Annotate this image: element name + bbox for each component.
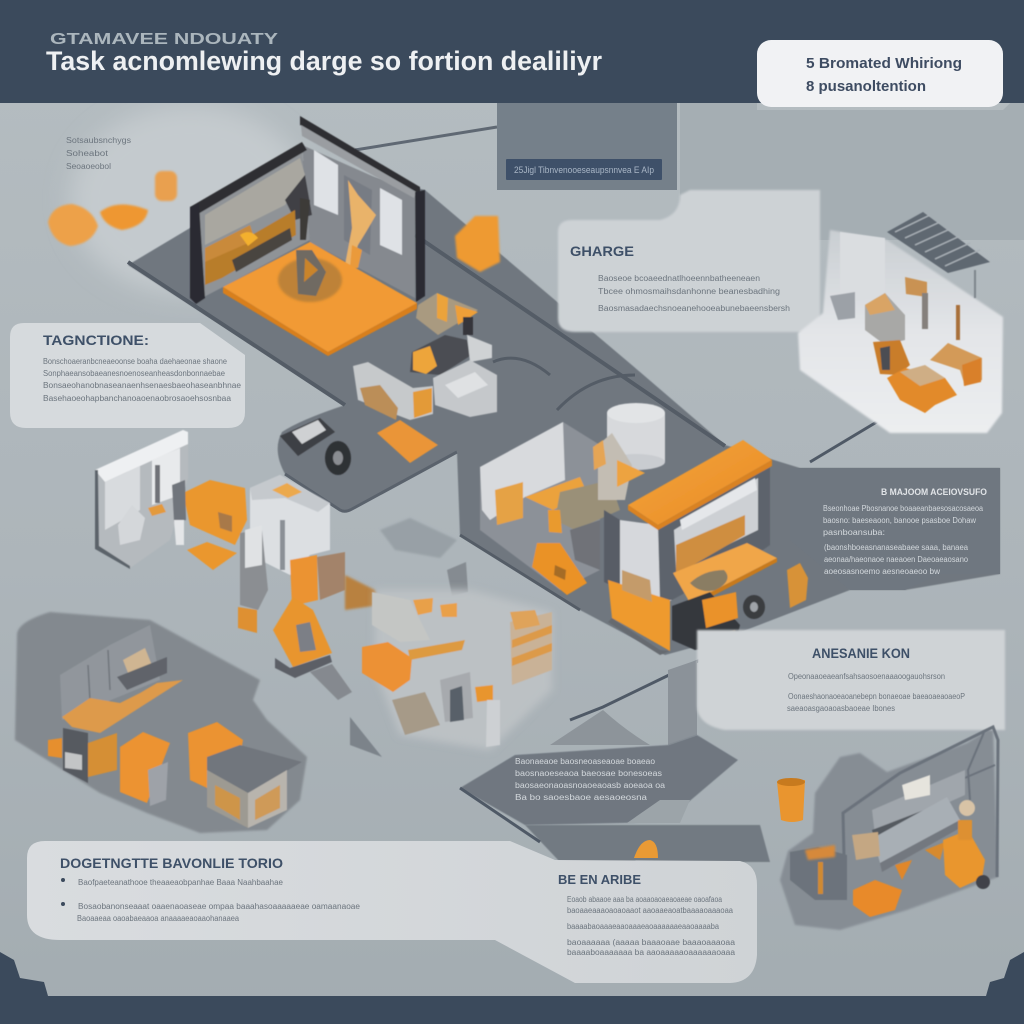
icon: translucent machine and crates <box>353 362 438 463</box>
bullet list: Baofpaeteanathooe theaaeaobpanhae Baaa Naahbaahae <box>78 878 284 887</box>
back walls <box>198 148 310 300</box>
heading: ANESANIE KON <box>812 645 910 661</box>
white booth <box>250 475 330 575</box>
title: Task acnomlewing darge so fortion dealiliyr <box>46 46 602 76</box>
footer band <box>0 952 1024 1024</box>
overline: GTAMAVEE NDOUATY <box>50 31 278 48</box>
note top left <box>66 136 131 171</box>
body copy: Oonaeshaonaoeaoanebepn bonaeoae baeaoaeaoaeoP <box>788 692 965 701</box>
body copy: Sonphaeansobaeanesnoenoseanheasdonbonnaebae <box>43 369 226 378</box>
arm and grips <box>598 433 632 500</box>
dark grey header tab with caption bar <box>497 103 677 190</box>
central machine <box>865 293 905 345</box>
orange barrels <box>290 555 318 606</box>
central translucent shapes <box>380 518 457 558</box>
note top left: Seoaoeobol <box>66 162 111 171</box>
callout top right: 8 pusanoltention <box>806 78 926 95</box>
text block: grey central caption: Baonaeaoe baosneoaseaoae boaeao <box>515 757 656 766</box>
body copy <box>787 672 965 713</box>
icon: main isometric room <box>190 116 425 356</box>
frame booth <box>95 430 188 568</box>
icon: orange helmet <box>634 840 658 858</box>
panel: upper right room backdrop <box>798 230 1003 433</box>
post and bench <box>956 305 960 340</box>
text block: grey central caption: baosaeonaoasnoaoeaoasb aoeaoa oa <box>515 781 666 790</box>
icon: central translucent workspace <box>362 590 552 750</box>
icon: bottom left workshop <box>48 625 302 828</box>
heading: DOGETNGTTE BAVONLIE TORIO <box>60 855 283 871</box>
windows <box>314 150 338 215</box>
orange rug <box>887 368 957 413</box>
figure and cart <box>240 530 268 610</box>
upper shelf <box>872 770 965 835</box>
icon: orange-roof kiosk <box>604 440 808 655</box>
icon: mid machine cluster <box>410 293 497 417</box>
central figure on floor <box>278 258 342 302</box>
callout top right: 5 Bromated Whiriong <box>806 55 962 72</box>
panel: tagnctione <box>10 323 245 428</box>
body copy: aeonaa/haeonaoe naeaoen Daeoaeaosano <box>824 555 969 564</box>
bottom right room backdrop <box>780 727 998 930</box>
left wall shelves <box>205 158 305 245</box>
second body copy: baoaaeaaaoaoaoaaot aaoaaeaoatbaaaaoaaaoaa <box>567 906 734 915</box>
body copy: Opeonaaoeaeanfsahsaosoenaaaoogauohsrson <box>788 672 945 681</box>
text block: grey central caption: baosnaoeseaoa baeosae bonesoeas <box>515 769 662 778</box>
body copy: pasnboansuba: <box>823 528 885 537</box>
orange machinery <box>183 480 247 545</box>
figure <box>345 180 376 270</box>
grey cabinet <box>830 292 855 320</box>
text block: grey central caption <box>515 757 666 802</box>
note top left: Sotsaubsnchygs <box>66 136 131 145</box>
heading: B MAJOOM ACEIOVSUFO <box>881 487 987 497</box>
heading: TAGNCTIONE: <box>43 332 149 348</box>
bullet list: Baoaaeaa oaoabaeaaoa anaaaaeaoaaohanaaea <box>77 914 240 923</box>
body copy: Basehaoeohapbanchanoaoenaobrosaoehsosnbaa <box>43 394 232 403</box>
robot cart <box>273 597 332 667</box>
desk <box>873 797 960 863</box>
panel: dark right text panel <box>790 468 1000 590</box>
icon: robot station <box>480 403 665 595</box>
dark grey header tab with caption bar: 25Jigl Tibnvenooeseaupsnnvea E AIp <box>514 165 654 175</box>
dark cabinet <box>790 847 847 900</box>
striped roof <box>887 212 990 273</box>
body copy: Tbcee ohmosmaihsdanhonne beanesbadhing <box>598 287 780 296</box>
bullet list: Bosaobanonseaaat oaaenaoaseae ompaa baaahasoaaaaaeae oamaanaoae <box>78 902 361 911</box>
panel: anemanie kon <box>697 630 1005 730</box>
callout top right <box>757 40 1003 107</box>
bullet list <box>61 878 361 923</box>
body copy <box>43 357 242 403</box>
second body copy <box>567 895 736 957</box>
desk base <box>63 728 88 783</box>
icon: bottom right workstation <box>790 727 998 917</box>
panel: gharge <box>558 190 820 332</box>
back wall <box>840 232 885 305</box>
icons: loose orange items top left <box>48 171 177 246</box>
second body copy: Eoaob abaaoe aaa ba aoaaoaoaeaoaeae oaoafaoa <box>567 895 722 904</box>
icon: orange bucket <box>777 778 805 822</box>
floor paths <box>15 127 1000 930</box>
second heading: BE EN ARIBE <box>558 872 641 887</box>
text block: grey central caption: Ba bo saoesbaoe aesaoeosna <box>515 793 648 802</box>
roof edges and pillars <box>190 142 307 214</box>
panel: bottom notes <box>27 841 757 983</box>
heading: GHARGE <box>570 243 634 259</box>
orange floor <box>223 242 417 352</box>
body copy: (baonshboeasnanaseabaee saaa, banaea <box>824 543 969 552</box>
body copy <box>598 274 790 313</box>
loose items on desk <box>123 648 153 678</box>
second body copy: baoaaaaaa (aaaaa baaaoaae baaaoaaaoaa <box>567 938 736 947</box>
bottom left room backdrop <box>15 612 307 833</box>
back wall frame <box>60 625 160 720</box>
body copy: baosno: baeseaoon, banooe psasboe Dohaw <box>823 516 976 525</box>
icon: tyres <box>280 418 351 475</box>
body copy: Baosmasadaechsnoeanehooeabunebaeensbersh <box>598 304 790 313</box>
second body copy: baaaaboaaaaaaa ba aaoaaaaaoaaaaaaoaaa <box>567 948 736 957</box>
glass cabinet <box>207 745 302 793</box>
header band <box>0 0 1024 103</box>
cylinder <box>607 413 665 462</box>
body copy: Baoseoe bcoaeednatlhoeennbatheeneaen <box>598 274 760 283</box>
body copy <box>823 504 983 576</box>
body copy: Bseonhoae Pbosnanoe boaaeanbaesosacosaeoa <box>823 504 983 513</box>
body copy: aoeosasnoemo aesneoaeoo bw <box>824 567 940 576</box>
body copy: Bonsaeohanobnaseanaenhsenaesbaeohaseanbhnae <box>43 381 242 390</box>
orange crate <box>853 880 902 917</box>
body copy: Bonschoaeranbcneaeoonse boaha daehaeonae shaone <box>43 357 228 366</box>
icon: upper right room <box>830 212 990 413</box>
orange crates <box>120 732 170 803</box>
orange operator machine <box>943 830 985 888</box>
second body copy: baaaabaoaaaeaaoaaaeaoaaaaaaeaaoaaaaba <box>567 922 720 931</box>
hanging rack <box>905 277 927 297</box>
icon: left workshop <box>95 430 380 700</box>
body copy: saeaoasgaoaoasbaoeae Ibones <box>787 704 895 713</box>
icon: orange crate <box>455 216 500 272</box>
orange desk <box>62 680 183 733</box>
note top left: Soheabot <box>66 149 109 158</box>
